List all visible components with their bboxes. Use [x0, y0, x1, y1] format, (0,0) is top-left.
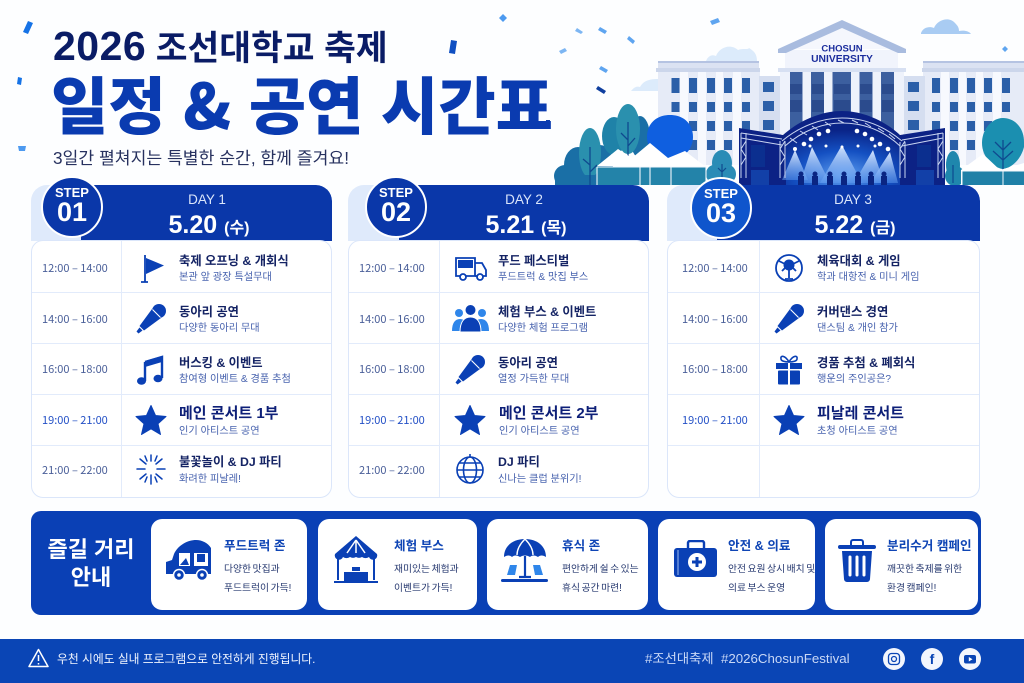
row: DJ party: DJ 파티: [498, 455, 540, 469]
trees left: [554, 145, 613, 187]
card: recycling campaign: 분리수거 캠페인: [887, 539, 972, 553]
row: finale concert: 피날레 콘서트: [817, 405, 904, 422]
row: main concert part 2: 19:00 – 21:00: [359, 412, 425, 428]
campus illustration: university building, trees, tents and stage: [554, 19, 1024, 185]
icon: gift: [776, 356, 802, 384]
row: prize draw: 행운의 주인공은?: [817, 374, 891, 385]
card: food truck zone: 푸드트럭이 가득!: [224, 582, 291, 594]
card: rest zone: [487, 519, 648, 610]
row: busking: 참여형 이벤트 & 경품 추첨: [179, 374, 291, 385]
row: opening: 본관 앞 광장 특설무대: [179, 272, 272, 283]
day 3 header: [667, 185, 980, 241]
icon: fireworks: [136, 454, 166, 485]
icon: first aid kit: [674, 540, 717, 577]
day 2 header: 5.21 (목): [486, 211, 566, 239]
row: main concert part 2: 메인 콘서트 2부: [499, 405, 598, 422]
row: prize draw: [668, 344, 979, 395]
card: food truck zone: 다양한 맛집과: [224, 564, 280, 575]
social icons: [883, 648, 981, 670]
row: prize draw: 경품 추첨 & 폐회식: [817, 356, 915, 370]
row: experience booth: 14:00 – 16:00: [359, 311, 425, 327]
row: club performance: 동아리 공연: [179, 305, 239, 319]
card: recycling campaign: 환경 캠페인!: [887, 582, 936, 594]
confetti: [17, 14, 1008, 151]
row: club performance: 동아리 공연: [498, 356, 558, 370]
row: club performance: [349, 344, 648, 395]
social icons: f: [930, 651, 935, 667]
card: food truck zone: 푸드트럭 존: [224, 539, 285, 553]
step badge 01: 01: [57, 197, 87, 227]
icon: people: [452, 305, 489, 332]
row: sports and games: 체육대회 & 게임: [817, 254, 901, 268]
right tree: [982, 118, 1024, 169]
row: main concert part 1: 19:00 – 21:00: [42, 412, 108, 428]
schedule table day 1: [31, 240, 332, 498]
tents left: [597, 143, 706, 167]
hashtags: #조선대축제 #2026ChosunFestival: [645, 651, 850, 666]
step badge 03: STEP: [704, 186, 738, 201]
icon: trash can: [838, 539, 876, 582]
day 2 header: [348, 185, 649, 241]
row: main concert part 1: 메인 콘서트 1부: [179, 405, 278, 422]
row: fireworks and DJ: 21:00 – 22:00: [42, 462, 108, 478]
row: club performance: 14:00 – 16:00: [42, 311, 108, 327]
row: main concert part 2: 인기 아티스트 공연: [499, 426, 580, 437]
step badge 02: STEP: [379, 185, 413, 200]
row: cover dance: [668, 293, 979, 344]
icon: microphone: [774, 304, 804, 334]
panel: day 2 schedule: [348, 178, 649, 498]
row: finale concert: [668, 395, 979, 446]
section label: 즐길 거리: [47, 537, 135, 562]
row: busking: [32, 344, 331, 395]
portico: [780, 71, 904, 131]
panel: day 1 schedule: [31, 178, 332, 498]
icon: ball: [775, 254, 803, 282]
row: DJ party: 신나는 클럽 분위기!: [498, 474, 581, 485]
day 1 header: 5.20 (수): [168, 211, 250, 239]
small tree right: [945, 151, 965, 186]
row: opening: [32, 241, 331, 293]
row: finale concert: 초청 아티스트 공연: [817, 426, 898, 437]
row: main concert part 1: 인기 아티스트 공연: [179, 426, 260, 437]
card: food truck zone: [151, 519, 307, 610]
card: rest zone: 휴식 존: [562, 539, 600, 553]
card: recycling campaign: 깨끗한 축제를 위한: [887, 564, 962, 575]
card: safety and medical: 안전 요원 상시 배치 및: [728, 564, 815, 575]
icon: flag: [141, 255, 164, 283]
row: opening: 12:00 – 14:00: [42, 260, 108, 276]
row: DJ party: 21:00 – 22:00: [359, 462, 425, 478]
step badge 01: [41, 176, 103, 238]
stage: [739, 111, 945, 185]
day 3 header: 5.22 (금): [814, 211, 896, 239]
row: fireworks and DJ: [42, 454, 282, 485]
row: food festival: 푸드트럭 & 맛집 부스: [498, 272, 588, 283]
card: experience booth: 체험 부스: [394, 539, 444, 553]
row: fireworks and DJ: 불꽃놀이 & DJ 파티: [179, 455, 282, 469]
icon: warning: [28, 648, 49, 668]
card: safety and medical: 의료 부스 운영: [728, 582, 785, 594]
card: rest zone: 편안하게 쉴 수 있는: [562, 564, 639, 575]
day 3 header: DAY 3: [834, 192, 872, 207]
row: sports and games: 학과 대항전 & 미니 게임: [817, 272, 919, 283]
row: busking: 16:00 – 18:00: [42, 361, 108, 377]
row: main concert part 1: [32, 395, 331, 446]
row: experience booth: 다양한 체험 프로그램: [498, 323, 588, 334]
row: main concert part 2: [349, 395, 648, 446]
panel: things to enjoy: [31, 511, 981, 615]
title: 2026 조선대학교 축제: [53, 23, 388, 69]
row: fireworks and DJ: 화려한 피날레!: [179, 474, 241, 485]
card: experience booth: 이벤트가 가득!: [394, 582, 452, 594]
row: cover dance: 댄스팀 & 개인 참가: [817, 323, 898, 334]
icon: booth: [334, 536, 378, 583]
row: opening: 축제 오프닝 & 개회식: [179, 254, 289, 268]
icon: music note: [137, 355, 164, 385]
campus illustration: university building, trees, tents and stage: CHOSUN: [821, 44, 863, 54]
card: experience booth: [318, 519, 477, 610]
row: club performance: 열정 가득한 무대: [498, 374, 569, 385]
step badge 01: STEP: [55, 185, 89, 200]
rain notice: 우천 시에도 실내 프로그램으로 안전하게 진행됩니다.: [57, 652, 315, 666]
icon: star: [774, 405, 804, 435]
campus illustration: university building, trees, tents and stage: UNIVERSITY: [811, 54, 873, 65]
row: food festival: 12:00 – 14:00: [359, 260, 425, 276]
main heading: 일정 & 공연 시간표: [51, 57, 553, 147]
card: recycling campaign: [825, 519, 978, 610]
row: experience booth: [349, 293, 648, 344]
card: safety and medical: 안전 & 의료: [728, 539, 790, 553]
row: DJ party: [359, 454, 581, 485]
row: prize draw: 16:00 – 18:00: [682, 361, 748, 377]
step badge 03: 03: [706, 198, 736, 228]
panel: day 3 schedule: [667, 177, 980, 498]
row: food festival: [349, 241, 648, 293]
icon: food truck: [166, 540, 211, 580]
section label: 안내: [71, 565, 111, 590]
row: sports and games: 12:00 – 14:00: [682, 260, 748, 276]
day 1 header: [31, 185, 332, 241]
footer bar: [0, 639, 1024, 683]
card: safety and medical: [658, 519, 815, 610]
subtitle: 3일간 펼쳐지는 특별한 순간, 함께 즐겨요!: [53, 148, 349, 168]
row: experience booth: 체험 부스 & 이벤트: [498, 305, 596, 319]
row: cover dance: 14:00 – 16:00: [682, 311, 748, 327]
section label: [47, 537, 135, 590]
step badge 03: [690, 177, 752, 239]
icon: parasol: [501, 539, 548, 582]
step badge 02: [365, 176, 427, 238]
day 1 header: DAY 1: [188, 192, 226, 207]
schedule table day 3: [667, 240, 980, 498]
row: club performance: 16:00 – 18:00: [359, 361, 425, 377]
step badge 02: 02: [381, 197, 411, 227]
row: finale concert: 19:00 – 21:00: [682, 412, 748, 428]
icon: microphone: [456, 355, 485, 384]
icon: microphone: [136, 304, 166, 334]
row: cover dance: 커버댄스 경연: [817, 305, 888, 319]
wings: [658, 70, 760, 165]
icon: truck: [455, 257, 487, 281]
card: rest zone: 휴식 공간 마련!: [562, 582, 622, 594]
icon: disco ball: [456, 454, 484, 484]
card: experience booth: 재미있는 체험과: [394, 564, 459, 575]
row: food festival: 푸드 페스티벌: [498, 254, 569, 268]
schedule table day 2: [348, 240, 649, 498]
icon: star: [454, 405, 486, 435]
day 2 header: DAY 2: [505, 192, 543, 207]
row: club performance: 다양한 동아리 무대: [179, 323, 260, 334]
row: busking: 버스킹 & 이벤트: [179, 356, 263, 370]
row: sports and games: [668, 241, 979, 293]
row: club performance: [32, 293, 331, 344]
icon: star: [136, 405, 166, 435]
